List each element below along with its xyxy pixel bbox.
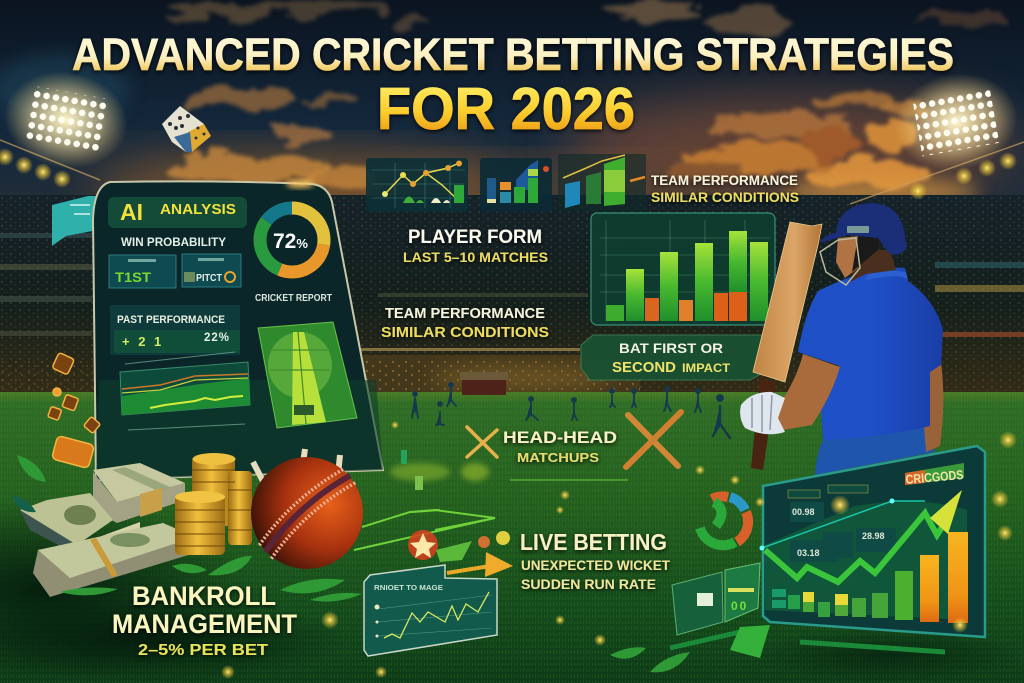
past performance panel: 22%	[204, 332, 230, 344]
icon: pavilion	[460, 372, 508, 395]
text: team performance, left: TEAM PERFORMANCE	[385, 306, 545, 322]
callout: bat first or second: SECOND	[612, 359, 676, 376]
shirt	[798, 266, 943, 440]
text: team performance, top right	[651, 173, 799, 205]
illustration: batsman	[770, 203, 943, 475]
text: live betting: SUDDEN RUN RATE	[521, 577, 656, 592]
background: stadium crowd	[0, 140, 1024, 401]
icon: open report booklet: 00	[731, 599, 748, 613]
text: player form	[403, 227, 548, 265]
cricket pitch card	[258, 322, 357, 428]
past performance panel	[110, 305, 240, 355]
icon: crossed bats large	[626, 412, 681, 467]
icon: left floodlight	[6, 73, 126, 167]
text: bankroll management: MANAGEMENT	[112, 609, 297, 639]
icon: gold arrow	[447, 552, 513, 577]
icon: donut chart	[700, 496, 748, 545]
text: live betting: LIVE BETTING	[520, 529, 667, 555]
title	[71, 38, 954, 134]
gauge: 72 percent: 72%	[273, 230, 308, 253]
decoration: glowing sparkles	[221, 421, 1017, 679]
panel: live odds dashboard	[760, 446, 985, 637]
icon: cricket bat	[751, 222, 822, 470]
text: head to head	[503, 429, 617, 465]
cricket report label: CRICKET REPORT	[255, 292, 332, 304]
callout: bat first or second: BAT FIRST OR	[619, 340, 723, 356]
title line 1: ADVANCED CRICKET BETTING STRATEGIES	[72, 29, 954, 80]
icon: green banknote	[730, 625, 770, 658]
AI analysis header: AI	[120, 199, 143, 225]
callout: bat first or second	[581, 335, 768, 380]
gauge: 72 percent	[260, 208, 324, 272]
dashboard readouts	[788, 485, 896, 562]
text: team performance, left: SIMILAR CONDITIONS	[381, 325, 549, 341]
title line 2: FOR 2026	[377, 76, 635, 142]
trousers	[815, 426, 935, 475]
icon: star burst	[408, 530, 510, 562]
text: bankroll management: 2–5% PER BET	[138, 642, 268, 659]
top bundle	[93, 463, 185, 523]
chart: mini live momentum panel: RNIOET TO MAGE	[374, 583, 443, 592]
text: team performance, top right: SIMILAR CONDITIONS	[651, 190, 799, 205]
icon: cricket ball with stumps	[251, 449, 363, 569]
player form detail: LAST 5–10 MATCHES	[403, 250, 548, 265]
stat card: toss	[109, 255, 176, 288]
middle bundle	[20, 493, 140, 558]
stat card: toss: T1ST	[115, 269, 151, 285]
chart: line mini chart	[366, 158, 468, 212]
dashboard area fill	[765, 501, 967, 620]
background: grass field	[0, 392, 1024, 683]
left arm	[770, 354, 840, 430]
player form heading: PLAYER FORM	[408, 227, 542, 248]
icon: gold coin stacks	[175, 453, 252, 555]
icon: crossed bats small	[467, 427, 497, 457]
dashboard bars	[772, 532, 968, 623]
illustration: pitch markings	[354, 510, 495, 550]
helmet and face	[820, 203, 907, 285]
icon: fielders on the pitch	[412, 383, 730, 438]
past performance panel: + 2 1	[122, 334, 164, 349]
text: team performance, top right: TEAM PERFORMANCE	[651, 173, 798, 188]
icon: dice	[162, 106, 211, 152]
icon: teal ticket	[52, 196, 98, 246]
chart: mini live momentum panel	[364, 565, 497, 656]
icon: batting glove	[740, 392, 785, 434]
past performance panel: PAST PERFORMANCE	[117, 314, 225, 326]
icon: gold tokens	[48, 352, 100, 469]
text: team performance, left	[380, 308, 548, 340]
chart: rising mini bars	[558, 154, 646, 212]
AI analysis header	[108, 197, 247, 228]
win probability label: WIN PROBABILITY	[121, 237, 226, 249]
dashboard readouts: 03.18	[797, 548, 820, 558]
bottom bundle	[33, 523, 195, 597]
dashboard readouts: 28.98	[862, 531, 885, 541]
panel: AI analysis tablet	[93, 180, 383, 480]
dashboard readouts: 00.98	[792, 507, 815, 517]
stat card: pitch: PITCT	[196, 272, 222, 284]
stat card: pitch	[182, 254, 241, 287]
icon: leaves	[12, 455, 690, 672]
icon: open report booklet	[670, 563, 945, 652]
background: night sky	[0, 0, 1024, 195]
icon: small side floodlights	[0, 148, 1017, 200]
dashboard trend arrow	[760, 490, 962, 582]
past performance line chart	[120, 352, 250, 430]
right arm	[922, 362, 943, 452]
text: bankroll management: BANKROLL	[132, 581, 276, 611]
text: head to head: HEAD-HEAD	[503, 429, 617, 447]
icon: money stacks	[20, 463, 195, 597]
text: live betting: UNEXPECTED WICKET	[521, 558, 671, 573]
chart: stacked mini bars	[480, 158, 552, 212]
icon: right floodlight	[898, 75, 1016, 168]
dashboard brand tag: CRICGODS	[905, 467, 964, 487]
text: head to head: MATCHUPS	[517, 450, 599, 465]
chart: large green and orange bars	[591, 213, 775, 325]
text: live betting	[520, 529, 671, 592]
AI analysis header: ANALYSIS	[160, 202, 236, 218]
callout: bat first or second: IMPACT	[682, 361, 731, 375]
text: bankroll management	[112, 581, 297, 659]
